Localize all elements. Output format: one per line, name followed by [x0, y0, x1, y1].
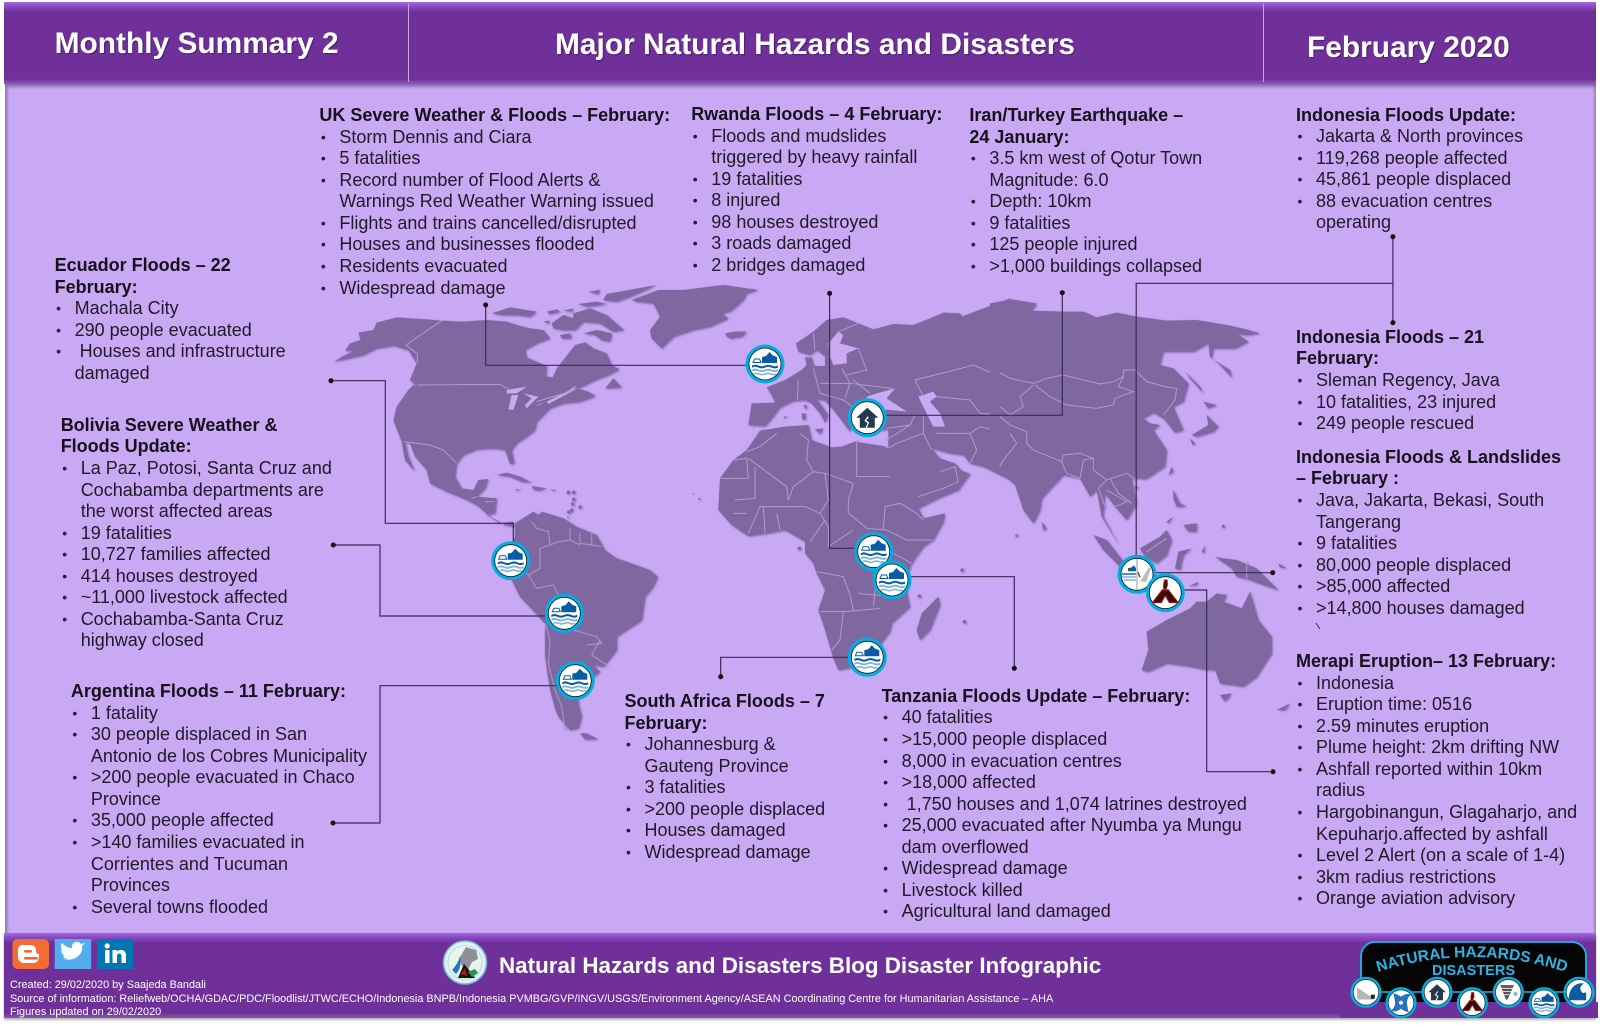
- heading: [61, 415, 277, 456]
- list: Livestock killed: [902, 880, 1023, 900]
- title: major natural hazards and disasters: Major Natural Hazards and Disasters: [555, 28, 1075, 61]
- list: Cochabamba departments are: [81, 480, 324, 500]
- icon: Tanzania flood: [872, 560, 912, 600]
- text block: Indonesia floods 21 February: [1296, 327, 1500, 433]
- list: >14,800 houses damaged: [1316, 598, 1525, 618]
- connector: Tanzania: [910, 577, 1014, 668]
- icon: Indonesia flood and landslide: [1118, 555, 1156, 594]
- list: the worst affected areas: [81, 501, 272, 521]
- list: Depth: 10km: [989, 191, 1091, 211]
- heading: February:: [1296, 348, 1379, 368]
- text block: South Africa floods: [624, 691, 825, 862]
- list: 3 fatalities: [644, 777, 726, 797]
- footer credit: updated: Figures updated on 29/02/2020: [10, 1006, 161, 1018]
- map region: South America: [508, 512, 658, 739]
- badge icon: landslide: [1350, 977, 1382, 1008]
- list: 3.5 km west of Qotur Town: [989, 148, 1202, 168]
- list: Widespread damage: [902, 858, 1068, 878]
- heading: [1296, 447, 1561, 488]
- list: [1298, 673, 1577, 908]
- list: Java, Jakarta, Bekasi, South: [1316, 490, 1544, 510]
- list: Jakarta & North provinces: [1316, 126, 1523, 146]
- list: Tangerang: [1316, 512, 1401, 532]
- icon: linkedin: [97, 939, 133, 969]
- heading: February:: [624, 713, 708, 733]
- icon: Ecuador flood: [491, 541, 530, 580]
- badge title second line: DISASTERS: [1432, 963, 1515, 979]
- list: 249 people rescued: [1316, 413, 1474, 433]
- list: Agricultural land damaged: [902, 901, 1111, 921]
- list: >15,000 people displaced: [902, 729, 1107, 749]
- list: 10,727 families affected: [81, 544, 270, 564]
- badge icon: tsunami: [1563, 977, 1595, 1008]
- list: Gauteng Province: [644, 756, 789, 776]
- icon: UK flood: [746, 344, 784, 384]
- list: Houses damaged: [644, 820, 786, 840]
- list: >85,000 affected: [1316, 576, 1450, 596]
- list: 8 injured: [711, 190, 780, 210]
- heading: Bolivia Severe Weather &: [61, 415, 277, 435]
- text block: Argentina floods: [71, 681, 367, 917]
- list: La Paz, Potosi, Santa Cruz and: [81, 458, 332, 478]
- heading: [624, 691, 825, 733]
- list: 40 fatalities: [902, 707, 993, 727]
- list: 88 evacuation centres: [1316, 191, 1492, 211]
- list: >200 people displaced: [644, 799, 825, 819]
- list: [884, 707, 1247, 921]
- list: damaged: [75, 363, 150, 383]
- list: 3km radius restrictions: [1316, 867, 1496, 887]
- list: Residents evacuated: [339, 256, 508, 276]
- text block: UK severe weather: [319, 105, 670, 298]
- icon: Bolivia flood: [545, 594, 584, 633]
- list: Record number of Flood Alerts &: [339, 170, 601, 190]
- connector: Argentina: [333, 686, 557, 823]
- list: [1298, 370, 1500, 433]
- heading: Indonesia Floods & Landslides: [1296, 447, 1561, 467]
- list: Indonesia: [1316, 673, 1394, 693]
- list: 9 fatalities: [1316, 533, 1397, 553]
- list: 125 people injured: [989, 234, 1138, 254]
- list: Cochabamba-Santa Cruz: [81, 609, 284, 629]
- list: dam overflowed: [902, 837, 1029, 857]
- list: Plume height: 2km drifting NW: [1316, 737, 1559, 757]
- text block: Indonesia floods update: [1296, 104, 1523, 232]
- list: 5 fatalities: [339, 148, 420, 168]
- icon: Merapi volcano: [1146, 573, 1185, 612]
- header divider right: [1263, 4, 1264, 82]
- connector: South Africa: [721, 657, 850, 677]
- heading: [969, 105, 1183, 147]
- connector lines: [331, 237, 1393, 823]
- title: monthly summary: Monthly Summary 2: [55, 27, 339, 60]
- list: Floods and mudslides: [711, 126, 886, 146]
- icon: South Africa flood: [848, 638, 887, 677]
- list: Johannesburg &: [644, 734, 776, 754]
- map region: North America and Greenland: [334, 285, 758, 527]
- list: 98 houses destroyed: [711, 212, 878, 232]
- connector: Rwanda: [830, 293, 856, 548]
- text block: Tanzania floods: [882, 686, 1247, 921]
- list: 1,750 houses and 1,074 latrines destroyed: [907, 794, 1247, 814]
- title: date: February 2020: [1307, 31, 1510, 64]
- connector: Indonesia floods and landslides: [1155, 572, 1273, 574]
- icon: blog globe logo: [444, 941, 486, 984]
- icon: blogger: [12, 939, 49, 969]
- badge title arc: NATURAL HAZARDS AND: [1376, 946, 1568, 972]
- list: >18,000 affected: [902, 772, 1036, 792]
- connector: Iran/Turkey: [886, 293, 1062, 415]
- footer title: Natural Hazards and Disasters Blog Disaster Infographic: [499, 953, 1101, 978]
- badge icon: tornado: [1493, 977, 1524, 1008]
- list: Provinces: [91, 875, 170, 895]
- list: >140 families evacuated in: [91, 832, 305, 852]
- list: 10 fatalities, 23 injured: [1316, 392, 1496, 412]
- heading: South Africa Floods – 7: [624, 691, 825, 711]
- list: [626, 734, 825, 862]
- heading: Argentina Floods – 11 February:: [71, 681, 346, 701]
- list: operating: [1316, 212, 1391, 232]
- footer bar: [4, 933, 1596, 1018]
- badge icon: volcano: [1457, 987, 1488, 1018]
- footer credit: created: Created: 29/02/2020 by Saajeda Bandali: [10, 979, 206, 991]
- list: highway closed: [81, 630, 204, 650]
- icon: Argentina flood: [556, 661, 595, 700]
- text block: Merapi eruption: [1296, 651, 1577, 908]
- list: Warnings Red Weather Warning issued: [339, 191, 654, 211]
- list: >1,000 buildings collapsed: [989, 256, 1202, 276]
- list: >200 people evacuated in Chaco: [91, 767, 355, 787]
- list: 25,000 evacuated after Nyumba ya Mungu: [902, 815, 1242, 835]
- list: Corrientes and Tucuman: [91, 854, 288, 874]
- heading: Tanzania Floods Update – February:: [882, 686, 1190, 706]
- map region: Europe, Africa and Middle East: [718, 298, 1010, 670]
- heading: [55, 255, 231, 297]
- list: [56, 298, 286, 383]
- list: [72, 703, 367, 917]
- heading: Floods Update:: [61, 436, 192, 456]
- list: 35,000 people affected: [91, 810, 274, 830]
- list: 290 people evacuated: [75, 320, 252, 340]
- text block: Rwanda floods: [691, 104, 942, 275]
- header bar: [4, 2, 1596, 84]
- map region: East and South Asia: [990, 299, 1260, 547]
- list: Antonio de los Cobres Municipality: [91, 746, 367, 766]
- text block: Indonesia floods and landslides: [1296, 447, 1561, 618]
- heading: – February :: [1296, 468, 1399, 488]
- list: 45,861 people displaced: [1316, 169, 1511, 189]
- list: [693, 126, 917, 275]
- list: Province: [91, 789, 161, 809]
- list: [62, 458, 332, 650]
- list: Eruption time: 0516: [1316, 694, 1472, 714]
- list: 1 fatality: [91, 703, 158, 723]
- connector: Merapi: [1184, 590, 1273, 772]
- heading: Iran/Turkey Earthquake –: [969, 105, 1183, 125]
- list: 3 roads damaged: [711, 233, 851, 253]
- text block: Ecuador floods: [55, 255, 286, 383]
- list: triggered by heavy rainfall: [711, 147, 917, 167]
- heading: Merapi Eruption– 13 February:: [1296, 651, 1556, 671]
- badge icon: flood: [1528, 987, 1560, 1018]
- list: 30 people displaced in San: [91, 724, 307, 744]
- list: [321, 127, 654, 298]
- list: Sleman Regency, Java: [1316, 370, 1500, 390]
- heading: Indonesia Floods – 21: [1296, 327, 1484, 347]
- list: Magnitude: 6.0: [989, 170, 1108, 190]
- heading: UK Severe Weather & Floods – February:: [319, 105, 670, 125]
- list: 19 fatalities: [711, 169, 802, 189]
- list: radius: [1316, 780, 1365, 800]
- list: Several towns flooded: [91, 897, 268, 917]
- heading: February:: [55, 277, 138, 297]
- list: ~11,000 livestock affected: [81, 587, 288, 607]
- list: 9 fatalities: [989, 213, 1070, 233]
- heading: [1296, 327, 1484, 368]
- map region: Southeast Asia islands and Australia: [1093, 525, 1290, 710]
- heading: Ecuador Floods – 22: [55, 255, 231, 275]
- list: 80,000 people displaced: [1316, 555, 1511, 575]
- icon: twitter: [55, 939, 91, 969]
- connector: Ecuador: [331, 381, 513, 542]
- heading: 24 January:: [969, 127, 1069, 147]
- list: Widespread damage: [644, 842, 811, 862]
- icon: Iran/Turkey earthquake: [848, 398, 887, 437]
- text block: Bolivia severe weather: [61, 415, 332, 650]
- list: Kepuharjo.affected by ashfall: [1316, 824, 1548, 844]
- list: Houses and infrastructure: [80, 341, 286, 361]
- list: Flights and trains cancelled/disrupted: [339, 213, 637, 233]
- connector: UK: [486, 305, 746, 365]
- header divider left: [408, 4, 409, 82]
- connector: Indonesia: [1136, 237, 1393, 556]
- icon: Rwanda flood: [854, 532, 893, 571]
- heading: Rwanda Floods – 4 February:: [691, 104, 942, 124]
- list: [1298, 126, 1523, 232]
- list: Ashfall reported within 10km: [1316, 759, 1542, 779]
- connector end dots: [328, 234, 1395, 825]
- footer credit: sources: Source of information: Reliefweb/OCHA/GDAC/PDC/Floodlist/JTWC/ECHO/Indonesia BNPB/Indonesia PVMBG/GVP/INGV/USGS/Environment Agency/ASEAN Coordinating Centre for Humanitarian Assistance – AHA: [10, 993, 1053, 1005]
- map: world land masses: [334, 285, 1290, 739]
- list: Orange aviation advisory: [1316, 888, 1515, 908]
- badge icon: earthquake: [1421, 977, 1453, 1008]
- list: 119,268 people affected: [1316, 148, 1508, 168]
- badge icon: cyclone: [1385, 987, 1417, 1018]
- list: 8,000 in evacuation centres: [902, 751, 1122, 771]
- list: Hargobinangun, Glagaharjo, and: [1316, 802, 1577, 822]
- list: Widespread damage: [339, 278, 506, 298]
- list: Houses and businesses flooded: [339, 234, 595, 254]
- list: [971, 148, 1202, 276]
- badge: natural hazards and disasters: [1340, 941, 1598, 1018]
- list: 414 houses destroyed: [81, 566, 258, 586]
- list: Storm Dennis and Ciara: [339, 127, 531, 147]
- list: Level 2 Alert (on a scale of 1-4): [1316, 845, 1565, 865]
- connector: Bolivia: [333, 545, 546, 616]
- list: 2 bridges damaged: [711, 255, 865, 275]
- list: 2.59 minutes eruption: [1316, 716, 1489, 736]
- text block: Iran/Turkey earthquake: [969, 105, 1202, 276]
- heading: Indonesia Floods Update:: [1296, 104, 1516, 124]
- stray mark: [1316, 623, 1320, 629]
- list: [1298, 490, 1544, 618]
- list: Machala City: [75, 298, 179, 318]
- list: 19 fatalities: [81, 523, 172, 543]
